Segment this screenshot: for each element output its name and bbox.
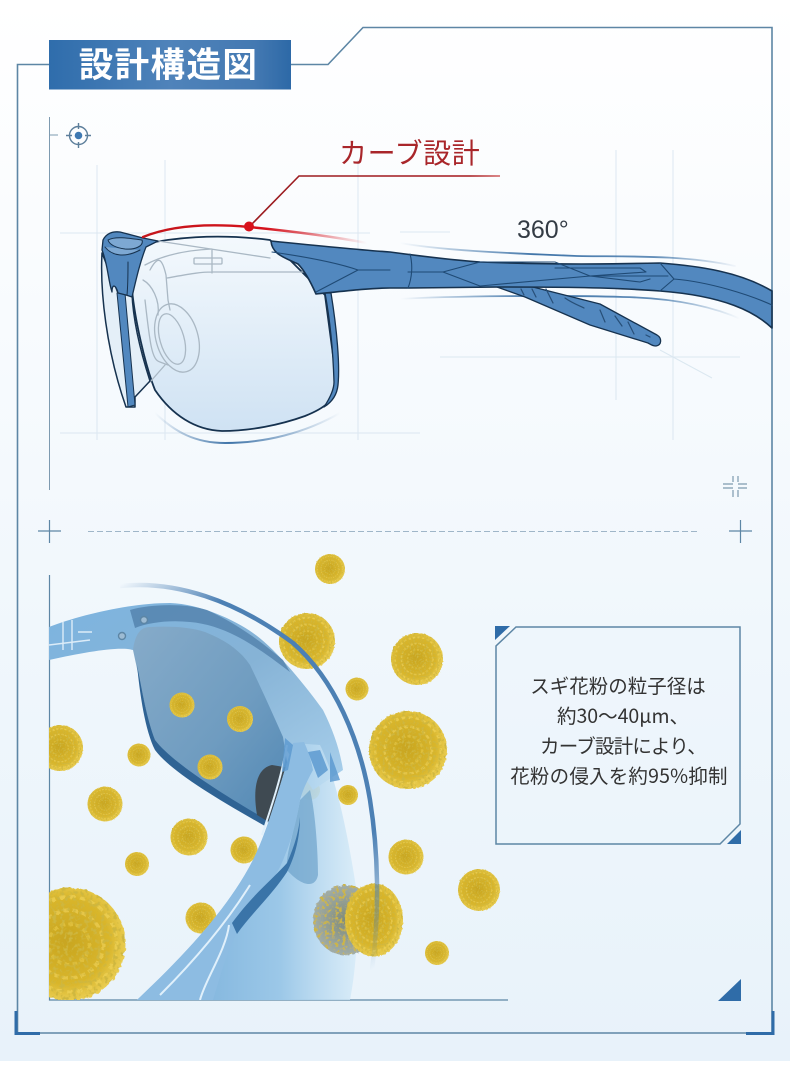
dark lens (133, 627, 290, 823)
grey pollen through lens (312, 884, 360, 956)
left strip (117, 293, 135, 407)
illustration: pollen and glasses close-up (12, 554, 500, 1000)
angle label: 360° (517, 216, 569, 244)
blue arc (120, 585, 377, 970)
pollen in front (12, 554, 500, 1000)
inner guide top left (50, 117, 58, 490)
frame corner: bottom right (746, 1011, 773, 1034)
lens right rim (324, 293, 339, 407)
temple arm facets (272, 252, 772, 305)
frame hardware details (49, 616, 148, 650)
arm tip texture (521, 289, 650, 337)
temple arm tip (497, 285, 661, 346)
bridge clips (282, 738, 340, 782)
pollen behind glasses (186, 613, 358, 934)
mark: cross left (38, 520, 61, 543)
dark lens lower rim (137, 665, 267, 826)
panel text: カーブ設計により、 (540, 730, 706, 759)
icon: crosshair target (66, 123, 91, 148)
hinge (102, 232, 158, 297)
dashed divider (88, 530, 700, 532)
inner guide bottom section (50, 575, 508, 1000)
panel outline (496, 627, 740, 844)
corner top left (495, 626, 510, 640)
temple arm (271, 241, 772, 328)
callout label: curve design: カーブ設計 (339, 138, 480, 169)
panel text: 花粉の侵入を約95%抑制 (510, 760, 728, 789)
bottom right triangle (718, 979, 741, 1001)
corner bottom right (727, 830, 741, 844)
frame shading (130, 605, 290, 672)
outer left lens (102, 253, 150, 407)
temple strip (137, 742, 313, 1000)
hinge detail (105, 238, 142, 295)
clear lens (137, 743, 358, 1000)
title banner: 設計構造図 (79, 47, 258, 85)
lens inner shade (287, 790, 318, 884)
diagram: sunglasses side view (102, 222, 772, 443)
panel text (510, 670, 728, 789)
frame corner: bottom left (16, 1011, 40, 1034)
title banner (49, 40, 291, 90)
mark: cross right (729, 520, 752, 543)
panel text: 約30～40μm、 (557, 700, 689, 729)
strip highlights (160, 745, 287, 1000)
lens engraving lines and nose pad (143, 241, 303, 382)
red anchor dot (244, 222, 254, 232)
strip dark band (232, 817, 300, 934)
info panel (495, 626, 741, 844)
main lens (132, 237, 337, 431)
motion swooshes (155, 243, 743, 443)
callout leader line (251, 176, 500, 225)
panel text: スギ花粉の粒子径は (530, 670, 706, 699)
faint drafting grid (60, 150, 740, 440)
curve highlight (143, 225, 367, 243)
nose shadow (255, 765, 286, 822)
mark: double cross (723, 476, 747, 497)
frame band (49, 603, 343, 790)
